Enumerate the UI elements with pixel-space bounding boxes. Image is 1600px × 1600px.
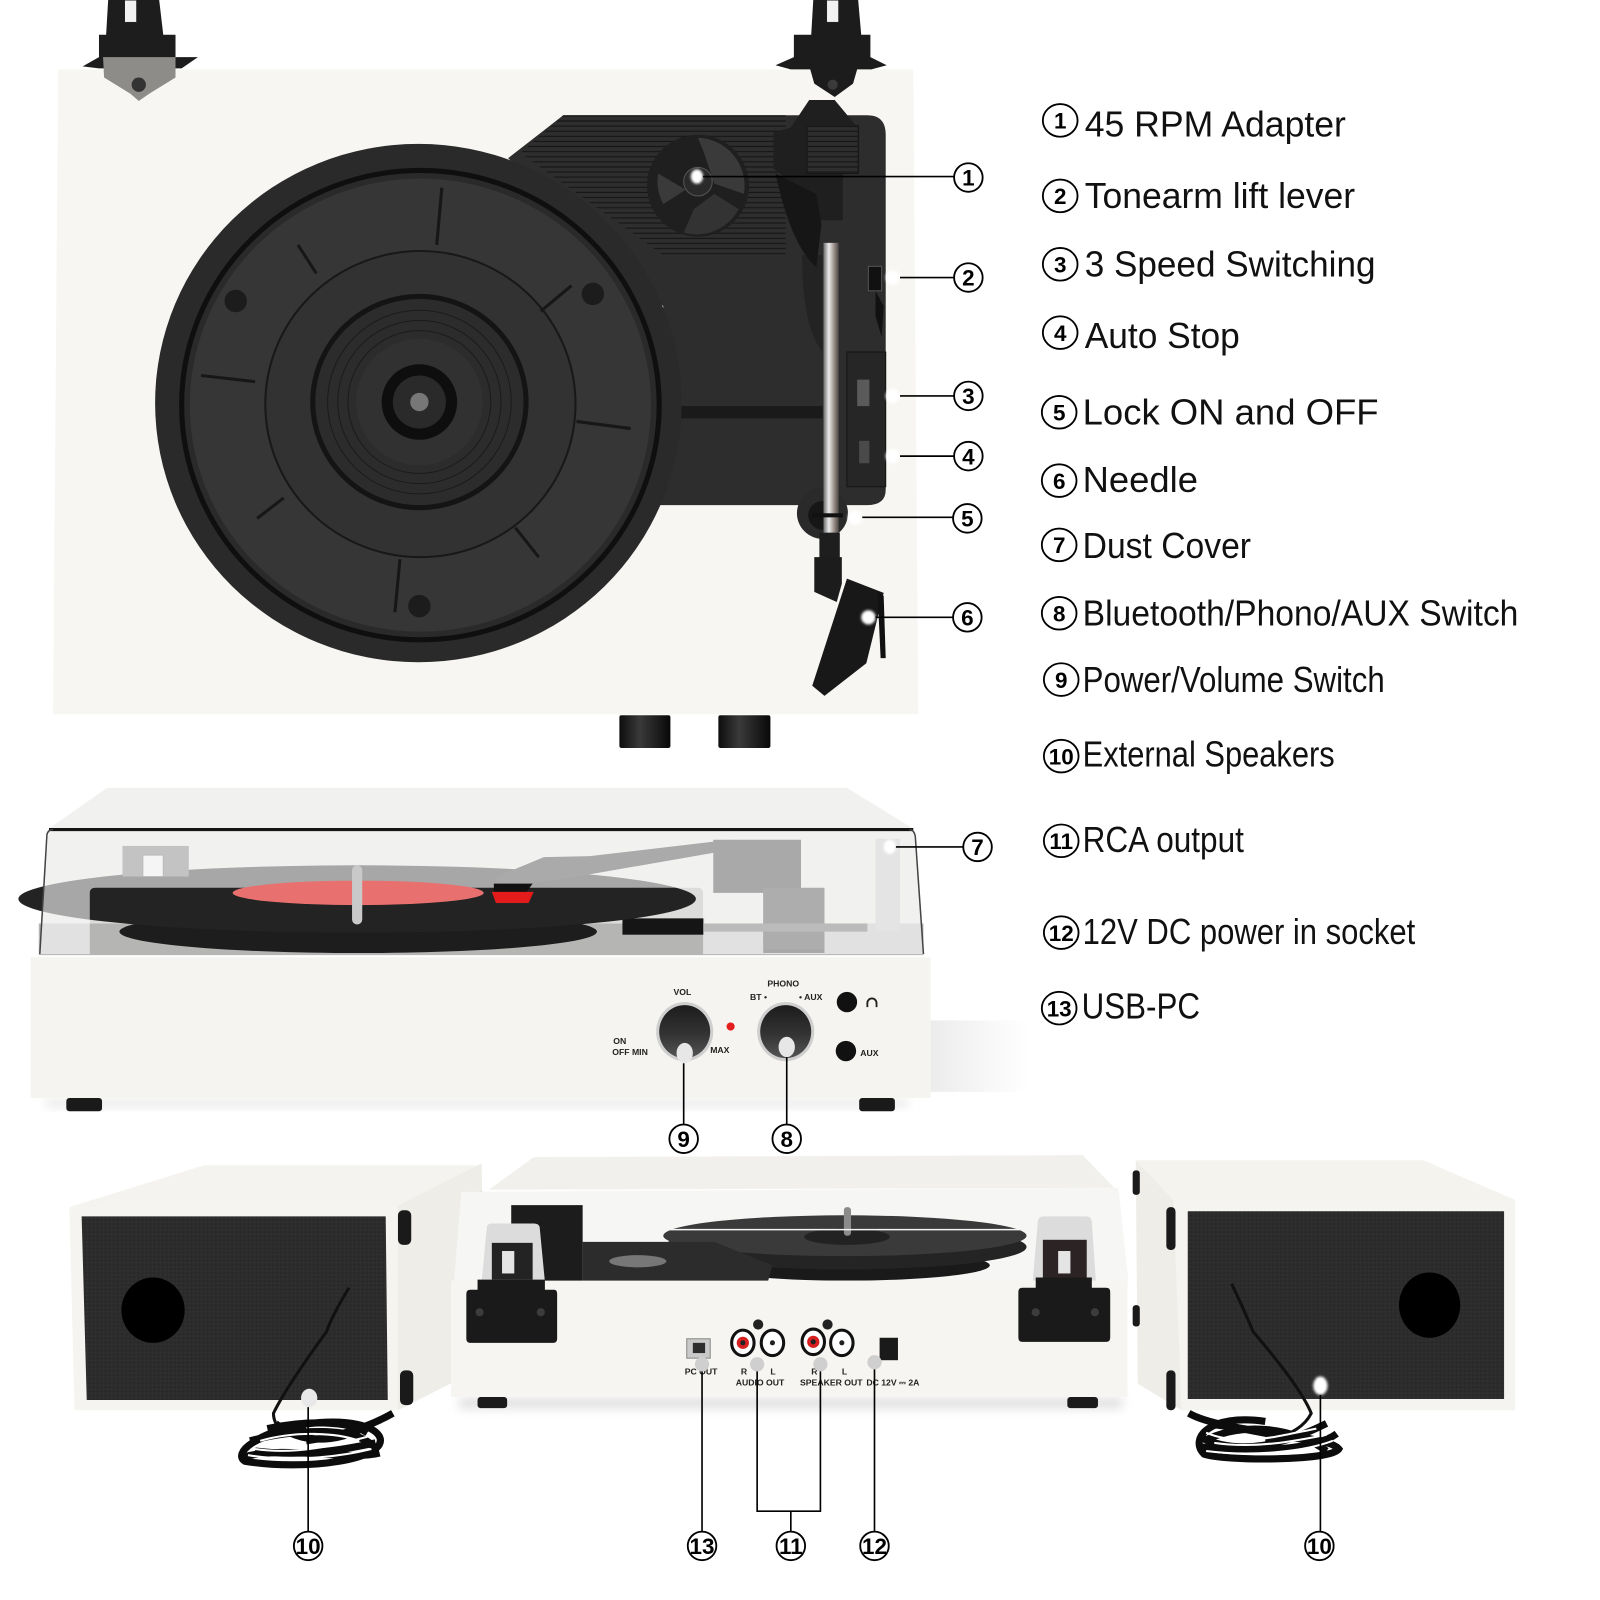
legend item 4: Auto Stop xyxy=(1085,316,1240,356)
legend item 5: Lock ON and OFF xyxy=(1083,392,1379,432)
panel labels xyxy=(612,979,879,1058)
callout 1: 1 xyxy=(962,166,975,191)
callout 10 right xyxy=(1305,1377,1334,1560)
USB port xyxy=(687,1339,710,1358)
legend item 9: Power/Volume Switch xyxy=(1083,660,1385,700)
callout 4: 4 xyxy=(962,444,975,469)
center turntable rear xyxy=(451,1155,1129,1408)
legend item 8: Bluetooth/Phono/AUX Switch xyxy=(1083,594,1518,634)
callout 11 xyxy=(750,1357,828,1560)
hinge: left xyxy=(83,0,198,101)
tonearm base plate xyxy=(508,115,886,505)
base xyxy=(451,1281,1128,1397)
panel: back view with speakers xyxy=(69,1155,1515,1465)
panel: front view with dust cover xyxy=(18,788,1028,1111)
legend item 10: 10 xyxy=(1049,744,1074,769)
shadow under center unit xyxy=(459,1398,1122,1408)
scene seen through cover xyxy=(18,829,923,955)
frosted dust cover panel xyxy=(39,829,923,954)
legend item 9: 9 xyxy=(1055,668,1067,693)
selector knob xyxy=(757,1002,814,1061)
panel labels: PHONO xyxy=(767,979,799,989)
legend item 3: 3 Speed Switching xyxy=(1085,245,1376,285)
clear cover back xyxy=(454,1188,1129,1282)
clear hinge towers xyxy=(482,1223,545,1282)
legend item 2: 2 xyxy=(1054,184,1066,209)
headphone jack xyxy=(837,992,877,1012)
port labels: L xyxy=(842,1366,848,1376)
callout 11: 11 xyxy=(779,1534,803,1559)
callout 6: 6 xyxy=(961,606,974,631)
legend item 1: 45 RPM Adapter xyxy=(1085,105,1346,145)
callout 2: 2 xyxy=(962,266,975,291)
callout 10 right: 10 xyxy=(1307,1534,1332,1559)
volume and selector knobs xyxy=(619,715,770,748)
legend item 5: 5 xyxy=(1053,400,1065,425)
port labels: R xyxy=(811,1366,818,1376)
callout 1 xyxy=(691,163,983,192)
panel labels: VOL xyxy=(673,987,692,997)
callout 3: 3 xyxy=(962,384,975,409)
soft shadow right xyxy=(931,1020,1028,1092)
callout 5 xyxy=(848,504,982,533)
dust cover top xyxy=(49,788,913,829)
callout 3 xyxy=(886,382,983,410)
legend item 3: 3 xyxy=(1054,252,1066,277)
panel labels: BT • xyxy=(750,992,767,1002)
port labels xyxy=(685,1366,920,1388)
port labels: DC 12V ⎓ 2A xyxy=(866,1378,920,1388)
legend item 7: Dust Cover xyxy=(1083,526,1251,566)
callout 4 xyxy=(886,442,983,470)
panel labels: • AUX xyxy=(799,992,823,1002)
platter xyxy=(155,144,682,662)
left speaker xyxy=(69,1163,486,1410)
callout 7 xyxy=(884,833,992,861)
panel: top view of turntable xyxy=(53,0,918,748)
callout 13 xyxy=(688,1357,716,1560)
port labels: PC OUT xyxy=(685,1366,718,1376)
cover top xyxy=(489,1155,1114,1190)
callout 8: 8 xyxy=(780,1127,793,1152)
legend item 13 xyxy=(1042,986,1200,1026)
rear feet xyxy=(478,1397,507,1408)
callout 10 left xyxy=(294,1389,322,1560)
callout 5: 5 xyxy=(961,507,974,532)
port labels: SPEAKER OUT xyxy=(800,1378,863,1388)
legend item 12: 12V DC power in socket xyxy=(1083,912,1415,952)
callout 7: 7 xyxy=(971,835,984,860)
power LED xyxy=(727,1022,735,1031)
aux jack xyxy=(836,1041,856,1061)
callout 10 left: 10 xyxy=(296,1534,321,1559)
cover edge xyxy=(40,830,923,954)
audio out RCA xyxy=(732,1319,784,1356)
callout 6 xyxy=(861,603,982,632)
platter seen from behind xyxy=(663,1207,1027,1281)
plate xyxy=(583,1242,772,1284)
tonearm xyxy=(773,100,886,696)
turntable board xyxy=(53,69,918,714)
callout 9 xyxy=(669,1063,698,1153)
spindle xyxy=(352,865,362,924)
callout 2 xyxy=(886,263,983,292)
45 RPM adapter xyxy=(647,135,749,237)
legend item 10: External Speakers xyxy=(1083,734,1335,774)
callout 9: 9 xyxy=(677,1127,690,1152)
right speaker xyxy=(1133,1160,1515,1410)
legend item 11: RCA output xyxy=(1083,820,1244,860)
port labels: R xyxy=(741,1366,748,1376)
callouts on product xyxy=(294,163,1334,1560)
volume knob xyxy=(656,1002,713,1063)
panel labels: OFF MIN xyxy=(612,1047,648,1057)
arm rest xyxy=(511,1205,583,1284)
hinge: right xyxy=(776,0,887,97)
cartridge xyxy=(492,884,534,903)
legend item 2: Tonearm lift lever xyxy=(1085,176,1355,216)
legend item 11: 11 xyxy=(1049,829,1073,854)
legend item 1: 1 xyxy=(1054,109,1066,134)
legend: numbered parts list xyxy=(1042,104,1518,1026)
legend item 6: Needle xyxy=(1083,460,1198,500)
legend item 13: 13 xyxy=(1047,996,1072,1021)
callout 12 xyxy=(860,1355,889,1560)
left hinge xyxy=(466,1280,557,1343)
callout 8 xyxy=(772,1057,801,1153)
panel labels: ON xyxy=(613,1036,626,1046)
callout 13: 13 xyxy=(690,1534,715,1559)
turntable base xyxy=(31,957,931,1098)
panel labels: MAX xyxy=(710,1045,730,1055)
port labels: L xyxy=(770,1366,776,1376)
right speaker cable xyxy=(1189,1284,1339,1459)
speaker out RCA xyxy=(802,1319,853,1356)
left speaker cable xyxy=(242,1288,393,1465)
legend item 6: 6 xyxy=(1053,469,1065,494)
feet xyxy=(66,1098,895,1111)
legend item 13: USB-PC xyxy=(1082,986,1200,1026)
record label xyxy=(233,881,484,905)
legend item 8: 8 xyxy=(1053,601,1065,626)
callout 12: 12 xyxy=(862,1534,887,1559)
legend item 4: 4 xyxy=(1054,321,1067,346)
soft shadow below xyxy=(46,1100,908,1106)
legend item 12: 12 xyxy=(1049,921,1074,946)
legend item 7: 7 xyxy=(1053,533,1065,558)
right hinge xyxy=(1018,1278,1110,1342)
DC socket xyxy=(880,1338,898,1360)
panel labels: AUX xyxy=(860,1048,879,1058)
port labels: AUDIO OUT xyxy=(736,1378,785,1388)
